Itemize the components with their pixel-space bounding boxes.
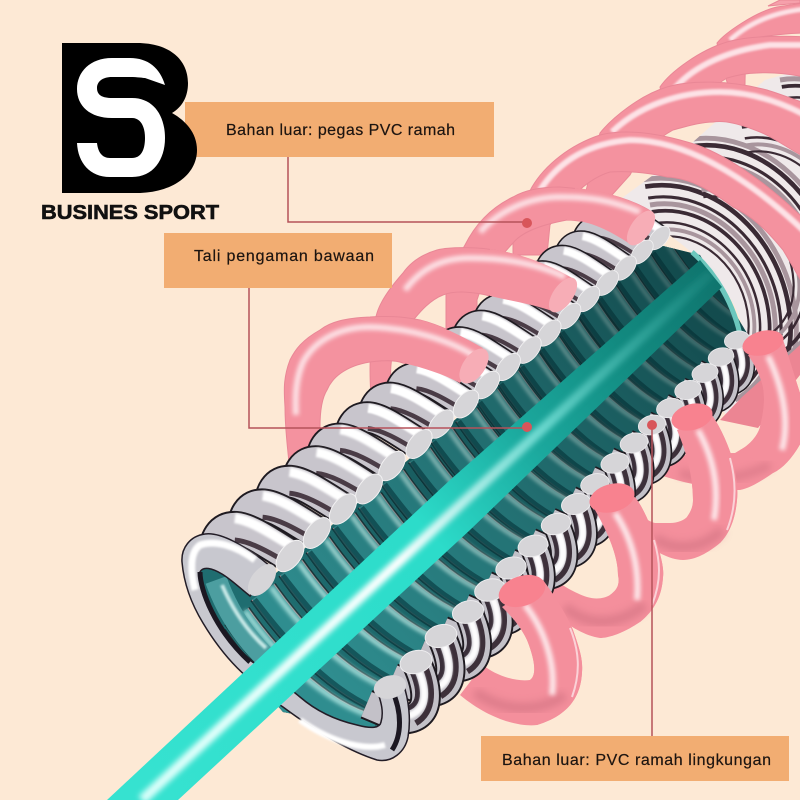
pink coil back section on the right	[720, 345, 800, 428]
pink coil return sections behind the lower silver	[460, 340, 800, 725]
logo	[41, 43, 219, 224]
front silver ring	[182, 534, 409, 760]
callout: eco-friendly PVC	[481, 420, 789, 781]
far silver coil ring	[622, 53, 800, 418]
callout: built-in safety cord	[164, 233, 532, 432]
pink coils, upper arc tips and highlights	[296, 188, 661, 415]
pink coils, upper arcs, back layer	[284, 0, 800, 490]
upper silver coil band with cut ends	[215, 206, 675, 577]
callout: built-in safety cord: Tali pengaman bawaan	[194, 248, 374, 265]
pink coils, lower front sections	[475, 326, 800, 725]
tube interior with teal ribs	[201, 246, 747, 727]
teal safety cable	[107, 260, 722, 800]
lower silver coil band with cut ends	[366, 326, 752, 723]
logo: BUSINES SPORT	[41, 202, 219, 224]
callout: eco-friendly PVC: Bahan luar: PVC ramah lingkungan	[502, 752, 771, 769]
callout: outer PVC spring	[185, 102, 532, 228]
callout: outer PVC spring: Bahan luar: pegas PVC ramah	[226, 122, 455, 139]
